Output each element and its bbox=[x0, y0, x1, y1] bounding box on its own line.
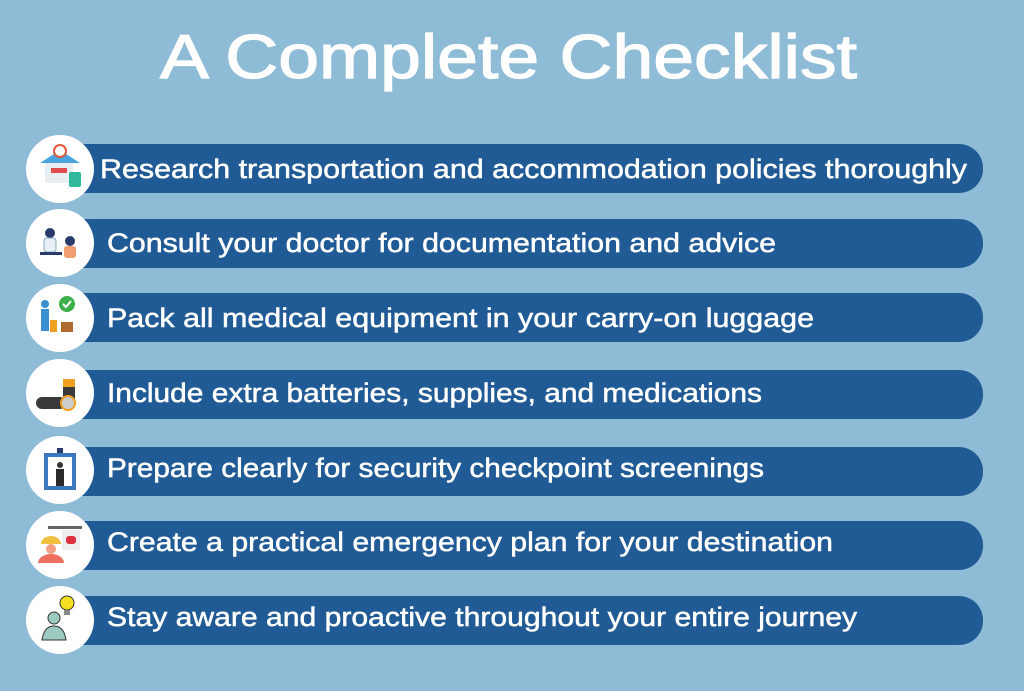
row 7: stay aware: Stay aware and proactive throughout your entire journey bbox=[107, 602, 858, 632]
row 4: batteries bbox=[26, 359, 983, 427]
row 2: doctor: Consult your doctor for documentation and advice bbox=[107, 228, 776, 258]
title: A Complete Checklist bbox=[160, 23, 857, 92]
icon: security scanner bbox=[46, 448, 74, 488]
row 7: stay aware bbox=[26, 586, 983, 654]
row 5: security: Prepare clearly for security checkpoint screenings bbox=[107, 453, 764, 483]
icon: doctor consult bbox=[40, 228, 76, 258]
icon: traveler with luggage bbox=[41, 296, 75, 332]
row 1: research bbox=[26, 135, 983, 203]
icon: lightbulb idea bbox=[42, 596, 74, 640]
row 1: research: Research transportation and accommodation policies thoroughly bbox=[100, 154, 968, 184]
row 5: security bbox=[26, 436, 983, 504]
row 6: emergency bbox=[26, 511, 983, 579]
row 6: emergency: Create a practical emergency plan for your destination bbox=[107, 527, 833, 557]
icon: hotel and luggage bbox=[40, 145, 81, 187]
icon: emergency worker and alarm bbox=[38, 526, 82, 563]
row 2: doctor bbox=[26, 209, 983, 277]
row 4: batteries: Include extra batteries, supplies, and medications bbox=[107, 378, 762, 408]
icon: batteries bbox=[36, 379, 75, 410]
row 3: pack bbox=[26, 284, 983, 352]
row 3: pack: Pack all medical equipment in your carry-on luggage bbox=[107, 303, 814, 333]
